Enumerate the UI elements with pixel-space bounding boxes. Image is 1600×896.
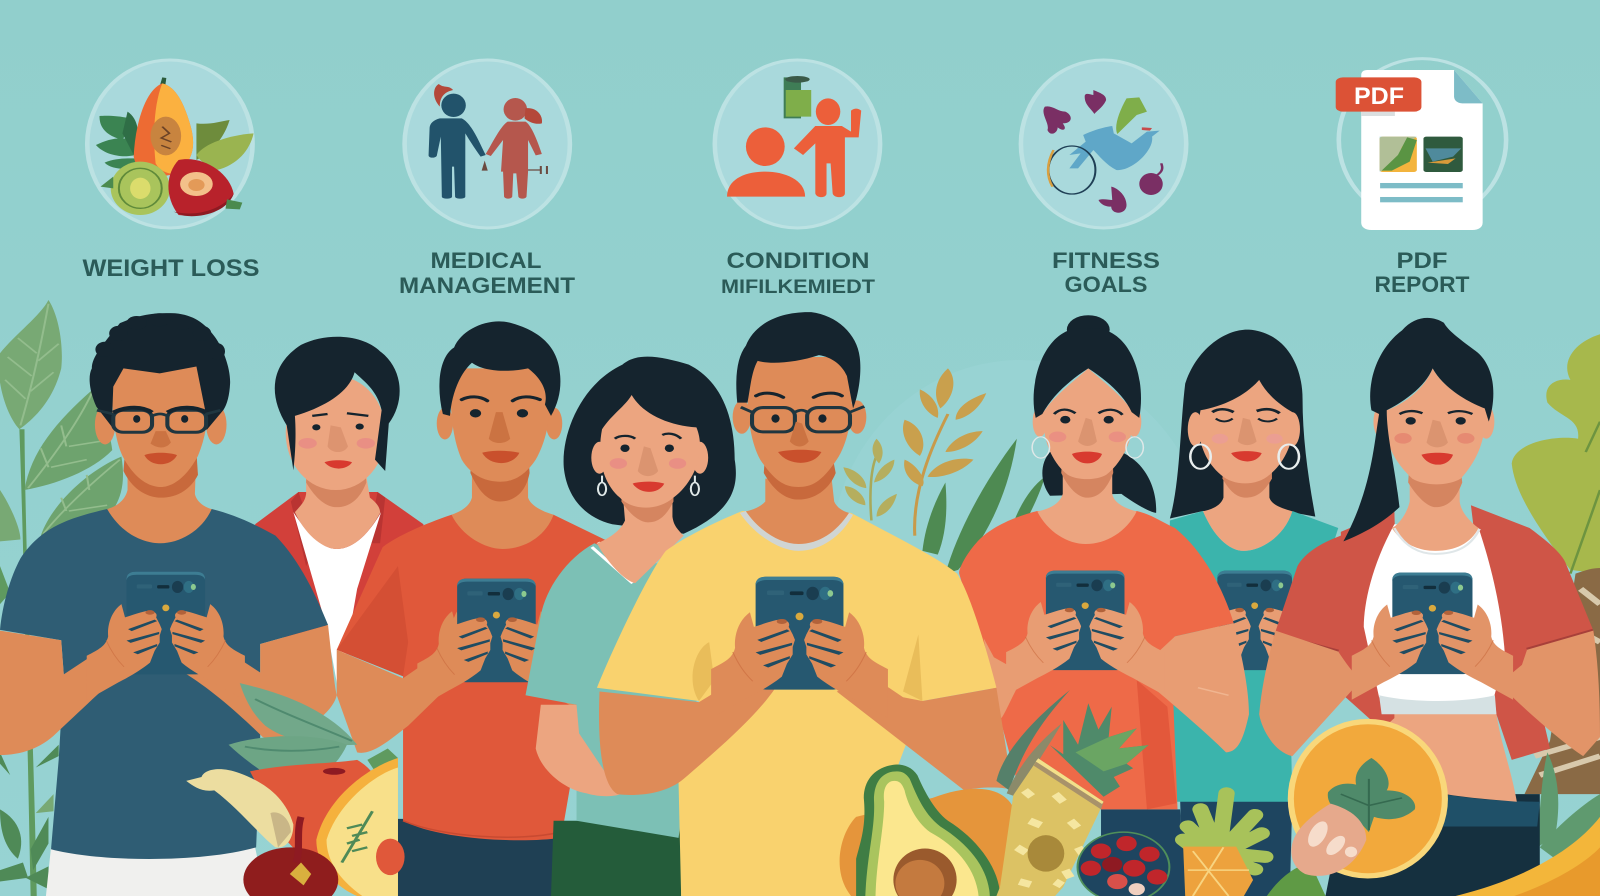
plants: centre grain and blades — [843, 368, 1045, 574]
person 5: front man in yellow t-shirt — [597, 312, 1013, 896]
label: pdf report: REPORT — [1374, 272, 1470, 297]
icon: weight loss fruit — [87, 60, 254, 228]
icon: fitness goals — [1021, 60, 1186, 228]
label: medical management: MANAGEMENT — [399, 273, 576, 298]
red fruit — [243, 847, 338, 896]
label: fitness goals: GOALS — [1064, 272, 1148, 297]
icon: pdf report document — [1336, 59, 1506, 230]
label: pdf report: PDF — [1396, 248, 1448, 273]
lemon slice — [316, 758, 398, 896]
person 1: blue t-shirt with glasses — [0, 313, 337, 896]
label: medical management: MEDICAL — [430, 248, 542, 273]
banana — [1456, 817, 1600, 896]
orange behind avocado — [840, 789, 1017, 896]
label: condition management: MIFILKEMIEDT — [721, 277, 875, 298]
label: fitness goals: FITNESS — [1052, 248, 1160, 273]
person 8: woman in red open shirt — [1259, 318, 1600, 896]
avocado — [856, 764, 1000, 896]
leaves — [240, 683, 357, 745]
fruit pile: right — [840, 690, 1600, 896]
plants: left foliage — [0, 300, 123, 896]
person 7: woman in teal top, back right — [1167, 330, 1338, 896]
big orange slice — [1267, 863, 1326, 896]
plants: right leaves and basket — [1512, 334, 1600, 863]
fruit pile: left — [186, 683, 405, 896]
person 4: woman in teal shirt — [526, 357, 736, 896]
icon: medical management couple — [405, 60, 570, 228]
person 3: orange t-shirt — [337, 321, 612, 896]
person 2: red jacket — [255, 337, 423, 693]
icon: condition management — [715, 60, 880, 228]
label: condition management: CONDITION — [726, 248, 870, 273]
tomato — [250, 760, 384, 878]
label: weight loss: WEIGHT LOSS — [82, 255, 260, 282]
small pineapple — [1183, 793, 1265, 869]
icon row — [87, 59, 1506, 230]
pdf badge label: PDF — [1354, 83, 1404, 110]
person 6: woman in coral t-shirt with bun — [959, 315, 1249, 896]
pale hill behind centre — [830, 360, 1210, 760]
pineapple jar — [996, 690, 1070, 790]
peel — [186, 769, 293, 848]
berry bowl — [1078, 832, 1169, 896]
